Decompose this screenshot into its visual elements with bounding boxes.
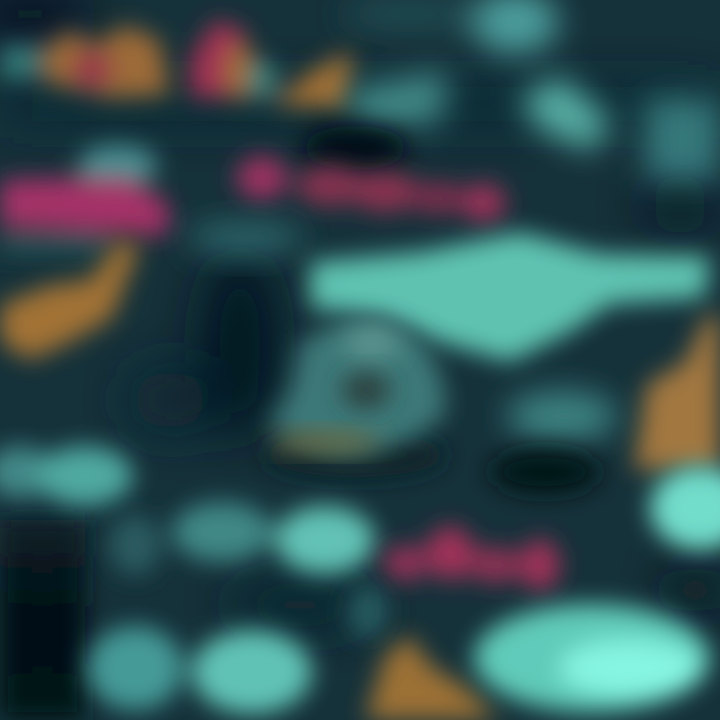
donut shadow [265, 433, 445, 477]
donut centre [342, 372, 390, 408]
right orange chart [634, 312, 720, 470]
bottom teal pair [87, 586, 388, 714]
dark gap [490, 450, 600, 494]
left teal pair [0, 446, 133, 506]
right teal oval [650, 466, 720, 550]
pink bottom heading [383, 526, 560, 591]
right teal label [506, 391, 618, 441]
donut chart [265, 320, 446, 477]
middle teal pair [109, 502, 375, 575]
left pink band [0, 145, 170, 252]
bottom right bright oval [474, 604, 710, 712]
top heading bar [0, 20, 352, 108]
top teal labels [342, 0, 720, 180]
bottom orange chart [365, 635, 498, 720]
dark gap above pink heading [303, 126, 407, 170]
large teal banner [310, 232, 710, 362]
pink heading [236, 156, 506, 223]
donut highlight [344, 325, 400, 361]
donut olive edge [270, 431, 380, 453]
small teal label [187, 222, 303, 254]
donut ring [268, 320, 446, 455]
left orange chart [0, 240, 140, 360]
bottom left dark column [0, 520, 85, 720]
